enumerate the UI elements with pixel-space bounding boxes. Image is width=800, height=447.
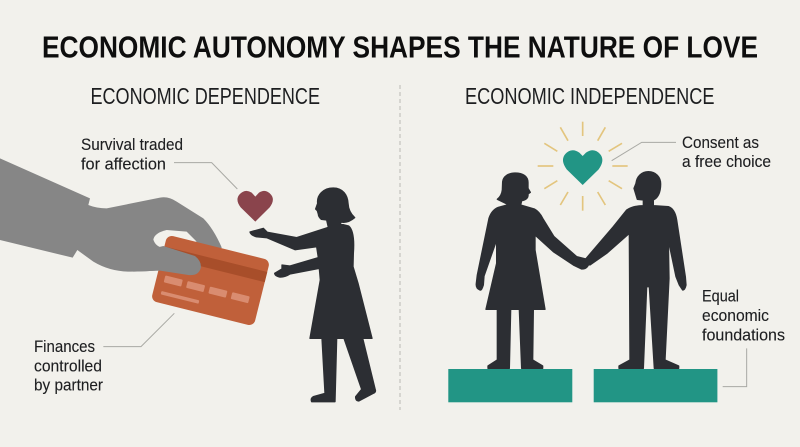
platform: left foundation — [448, 369, 572, 402]
heading: economic independence: ECONOMIC INDEPENDENCE — [465, 83, 714, 109]
callout: finances controlled by partner: by partner — [34, 376, 103, 394]
panel: economic independence — [448, 83, 785, 402]
callout: equal economic foundations: economic — [702, 306, 769, 325]
callout: survival traded for affection — [81, 135, 237, 189]
figure: woman holding hands — [476, 173, 590, 368]
icon: radiant teal heart — [538, 122, 628, 211]
callout: equal economic foundations — [702, 286, 785, 387]
callout: survival traded for affection: for affection — [81, 154, 166, 174]
figure: man holding hands — [584, 172, 686, 368]
callout: consent as a free choice: a free choice — [682, 152, 771, 171]
callout: survival traded for affection: Survival traded — [81, 135, 183, 154]
panel: economic dependence — [0, 83, 375, 402]
callout: equal economic foundations: Equal — [702, 286, 739, 306]
figure: woman reaching — [250, 188, 375, 402]
icon: credit card — [151, 235, 270, 326]
callout: finances controlled by partner: controlled — [34, 356, 102, 376]
callout: finances controlled by partner: Finances — [34, 337, 95, 356]
callout: equal economic foundations: foundations — [702, 326, 785, 344]
callout: consent as a free choice — [612, 133, 771, 171]
callout: consent as a free choice: Consent as — [682, 133, 759, 152]
heading: economic dependence: ECONOMIC DEPENDENCE — [90, 83, 320, 109]
platform: right foundation — [594, 369, 717, 402]
icon: muted heart — [237, 191, 273, 222]
icon: controlling hand holding card — [0, 158, 270, 326]
callout: finances controlled by partner — [34, 313, 174, 394]
